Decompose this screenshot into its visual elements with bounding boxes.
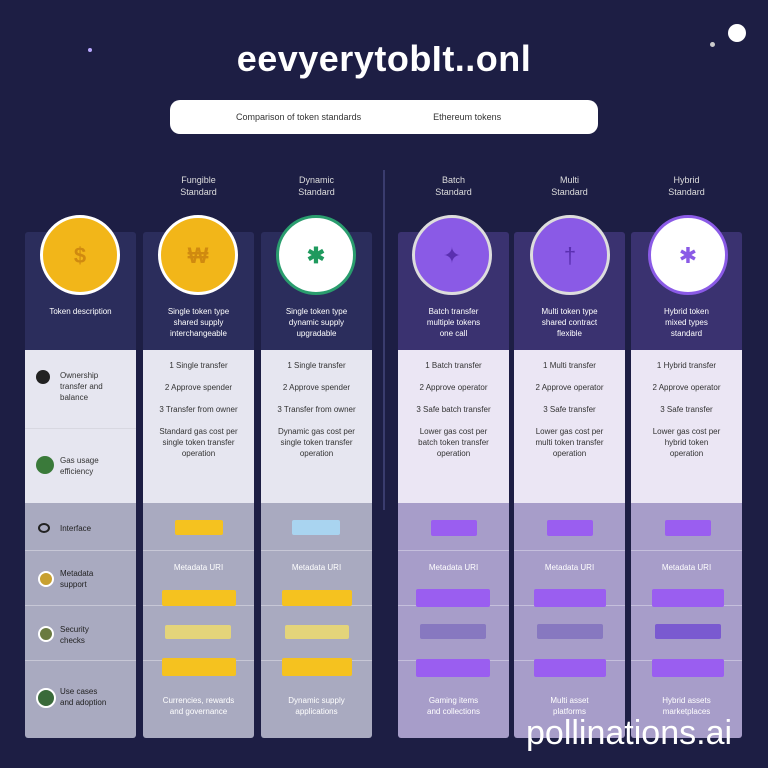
text: 2 Approve operator — [535, 383, 604, 392]
text: Dynamic gas cost per — [278, 427, 355, 436]
subtitle pill — [170, 100, 598, 134]
text: ₩ — [188, 243, 208, 268]
text: standard — [671, 329, 702, 338]
subtitle pill: Comparison of token standards Ethereum tokens — [236, 112, 501, 122]
text: dynamic supply — [289, 318, 344, 327]
text: 3 Transfer from owner — [277, 405, 356, 414]
text: Lower gas cost per — [536, 427, 603, 436]
text: shared contract — [542, 318, 597, 327]
descriptions: Token description — [49, 307, 112, 316]
text: ✦ — [443, 243, 461, 268]
column 1: row labels — [25, 232, 136, 738]
text: Hybrid token — [664, 307, 709, 316]
text: Dynamic supply — [288, 696, 345, 705]
title: eevyerytobIt..onl — [237, 38, 531, 79]
text: Metadata — [60, 569, 93, 578]
text: 1 Single transfer — [287, 361, 346, 370]
column headings: Fungible — [181, 175, 216, 185]
text: Multi asset — [550, 696, 589, 705]
text: flexible — [557, 329, 582, 338]
text: Batch — [442, 175, 465, 185]
text: ✱ — [679, 243, 697, 268]
icons — [40, 215, 120, 295]
text: and collections — [427, 707, 480, 716]
text: 1 Single transfer — [169, 361, 228, 370]
text: Standard — [668, 187, 705, 197]
text: Interface — [60, 524, 91, 533]
feature text light rows: transfer and — [60, 382, 103, 391]
text: operation — [182, 449, 215, 458]
text: Gaming items — [429, 696, 478, 705]
text: 3 Safe transfer — [660, 405, 713, 414]
feature text light rows — [60, 371, 103, 402]
divider — [383, 170, 385, 510]
text: 1 Batch transfer — [425, 361, 482, 370]
bars yellow/blue — [175, 520, 223, 535]
text: Lower gas cost per — [420, 427, 487, 436]
text: Multi — [560, 175, 579, 185]
text: † — [564, 243, 576, 268]
column 5 — [514, 232, 625, 738]
text: 3 Safe batch transfer — [416, 405, 491, 414]
text: multiple tokens — [427, 318, 480, 327]
column 6 — [631, 232, 742, 738]
feature text light rows: balance — [60, 393, 88, 402]
column 4 — [398, 232, 509, 738]
text: Hybrid — [673, 175, 700, 185]
text: Gas usage — [60, 456, 99, 465]
text: $ — [74, 243, 86, 268]
text: Lower gas cost per — [653, 427, 720, 436]
text: support — [60, 580, 87, 589]
text: Currencies, rewards — [163, 696, 234, 705]
column headings: Standard — [180, 187, 217, 197]
text: Security — [60, 625, 89, 634]
text: Standard — [298, 187, 335, 197]
text: multi token transfer — [535, 438, 604, 447]
gray rows labels — [38, 523, 50, 533]
text: Dynamic — [299, 175, 334, 185]
text: single token transfer — [162, 438, 235, 447]
text: operation — [437, 449, 470, 458]
text: platforms — [553, 707, 586, 716]
feature text light rows: Ownership — [60, 371, 98, 380]
gray row text: Metadata URI — [174, 563, 223, 572]
text: 2 Approve spender — [165, 383, 232, 392]
text: 3 Safe transfer — [543, 405, 596, 414]
column 3 — [261, 232, 372, 738]
text: Metadata URI — [429, 563, 478, 572]
text: Use cases — [60, 687, 97, 696]
text: Single token type — [168, 307, 229, 316]
text: Batch transfer — [429, 307, 478, 316]
text: marketplaces — [663, 707, 710, 716]
bars purple — [431, 520, 477, 536]
text: ✱ — [307, 243, 325, 268]
text: Standard — [551, 187, 588, 197]
text: efficiency — [60, 467, 93, 476]
text: 2 Approve operator — [419, 383, 488, 392]
text: 2 Approve operator — [652, 383, 721, 392]
text: Multi token type — [541, 307, 598, 316]
text: operation — [300, 449, 333, 458]
text: operation — [553, 449, 586, 458]
text: interchangeable — [170, 329, 227, 338]
text: and adoption — [60, 698, 106, 707]
text: Hybrid assets — [662, 696, 711, 705]
text: batch token transfer — [418, 438, 489, 447]
text: 3 Transfer from owner — [159, 405, 238, 414]
text: applications — [295, 707, 338, 716]
decorative stars — [728, 24, 746, 42]
watermark: pollinations.ai — [526, 714, 732, 752]
text: Standard gas cost per — [159, 427, 238, 436]
text: shared supply — [174, 318, 223, 327]
column 2 — [143, 232, 254, 738]
text: checks — [60, 636, 85, 645]
text: Metadata URI — [662, 563, 711, 572]
column headings — [180, 175, 217, 197]
text: operation — [670, 449, 703, 458]
text: Metadata URI — [292, 563, 341, 572]
text: hybrid token — [665, 438, 708, 447]
text: 1 Hybrid transfer — [657, 361, 716, 370]
text: Standard — [435, 187, 472, 197]
text: Single token type — [286, 307, 347, 316]
text: Metadata URI — [545, 563, 594, 572]
text: and governance — [170, 707, 227, 716]
text: upgradable — [296, 329, 337, 338]
text: mixed types — [665, 318, 708, 327]
text: single token transfer — [280, 438, 353, 447]
text: one call — [440, 329, 467, 338]
text: 1 Multi transfer — [543, 361, 596, 370]
text: 2 Approve spender — [283, 383, 350, 392]
